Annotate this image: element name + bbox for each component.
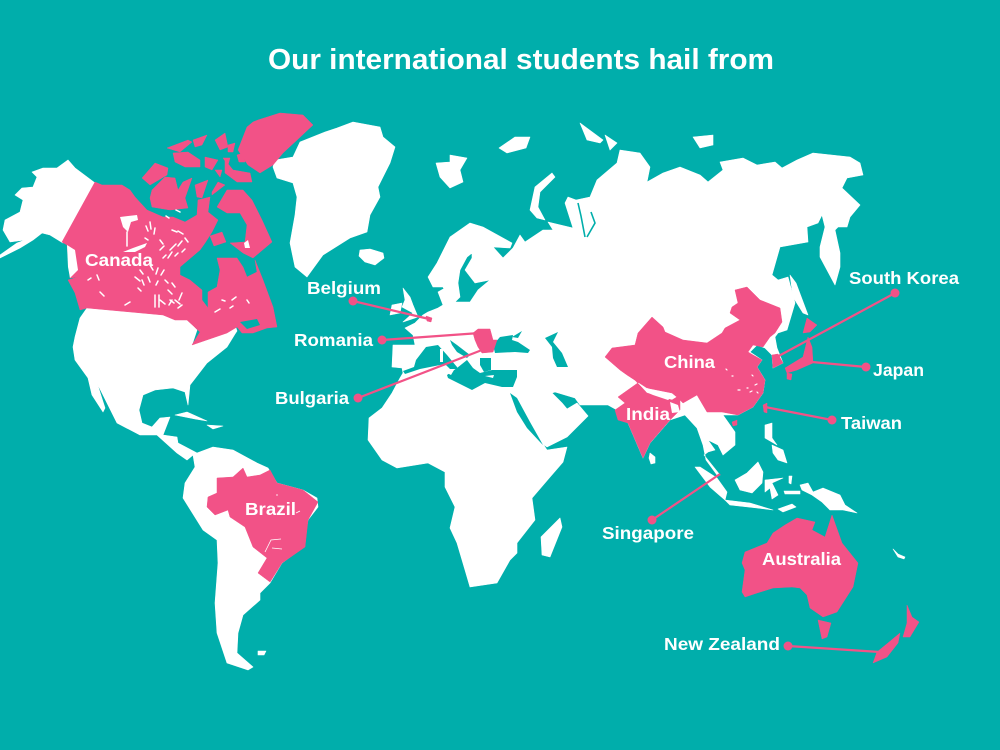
- line: Belgium: [348, 296, 429, 319]
- Quebec lake: [244, 240, 250, 248]
- Philippines Luzon: [765, 423, 777, 445]
- Brazil: [207, 468, 318, 582]
- New Guinea: [800, 483, 857, 513]
- line: Romania: [378, 333, 480, 344]
- Chinese lakes: [726, 369, 758, 393]
- Sea of Azov: [512, 331, 522, 338]
- Philippines Mindanao: [772, 445, 787, 463]
- line: Japan: [812, 362, 870, 372]
- world map: [0, 113, 919, 670]
- line: South Korea: [775, 288, 900, 358]
- Taiwan: [763, 403, 767, 413]
- title: Our international students hail from: [268, 44, 774, 76]
- Afro-Eurasia: [368, 150, 863, 587]
- Hainan: [732, 420, 737, 426]
- Eastern Mediterranean: [447, 360, 517, 390]
- Victoria Island: [150, 177, 192, 210]
- Ireland: [390, 303, 402, 315]
- Western Mediterranean: [403, 345, 458, 374]
- Falklands: [258, 651, 266, 655]
- Honshu: [785, 337, 813, 373]
- Novaya Zemlya: [530, 173, 555, 220]
- labels: [85, 250, 959, 654]
- South Korea: [772, 354, 783, 368]
- Kyushu: [787, 373, 792, 380]
- label: Singapore: Singapore: [602, 523, 694, 543]
- white details on pink countries: [67, 210, 758, 552]
- Adriatic: [450, 340, 470, 358]
- Mediterranean islands: [440, 349, 494, 378]
- Belgium: [426, 316, 432, 322]
- Borneo: [735, 462, 763, 493]
- Ellesmere Island: [238, 113, 313, 173]
- Tasmania: [818, 620, 831, 639]
- Baffin Island: [217, 190, 272, 258]
- label: Taiwan: Taiwan: [841, 413, 902, 433]
- Great Slave Lake: [123, 243, 147, 252]
- Australia: [742, 515, 858, 617]
- Somerset Island: [195, 180, 208, 198]
- New Caledonia and Vanuatu: [893, 549, 905, 559]
- line: Bulgaria: [354, 350, 482, 402]
- Aegean: [480, 358, 491, 372]
- Bangladesh: [670, 402, 680, 413]
- connector lines: [348, 288, 900, 652]
- Greenland: [273, 122, 395, 277]
- Alaska: [0, 160, 95, 258]
- Great Bear Lake: [120, 215, 138, 232]
- New Zealand North Island: [903, 605, 919, 637]
- Madagascar: [541, 518, 562, 557]
- Gulf of St Lawrence: [240, 319, 260, 329]
- label: New Zealand: New Zealand: [664, 634, 780, 654]
- Arctic islands: [212, 182, 225, 195]
- Romania and Bulgaria: [473, 329, 497, 353]
- Cuba: [175, 412, 207, 421]
- Brazilian rivers: [265, 494, 300, 552]
- label: Japan: Japan: [873, 360, 924, 380]
- Sumatra: [695, 467, 727, 500]
- China: [605, 287, 782, 415]
- Hokkaido: [803, 318, 817, 333]
- Nepal: [646, 388, 672, 400]
- label: Canada: Canada: [85, 250, 153, 270]
- Hispaniola: [207, 425, 223, 429]
- Canadian lakes: [88, 210, 249, 312]
- line: New Zealand: [784, 642, 880, 652]
- New Siberian Islands: [693, 135, 713, 148]
- Java and Lesser Sunda: [725, 500, 773, 510]
- Red Sea: [510, 393, 543, 445]
- label: Bulgaria: Bulgaria: [275, 388, 349, 408]
- Canada mainland: [62, 182, 277, 345]
- Devon Island: [225, 160, 252, 182]
- line: Singapore: [648, 474, 720, 524]
- Iceland: [359, 249, 384, 265]
- Alaska-Canada coastal strip: [67, 245, 78, 278]
- seas and lakes cut out of land: [403, 331, 568, 445]
- Ob and Taz gulfs: [578, 203, 595, 237]
- Severnaya Zemlya: [580, 123, 603, 143]
- pink countries: [62, 113, 919, 663]
- label: Brazil: Brazil: [245, 499, 296, 519]
- label: Belgium: Belgium: [307, 278, 381, 298]
- Sulawesi: [765, 478, 783, 499]
- line: Taiwan: [765, 407, 836, 424]
- Sakhalin: [790, 275, 808, 315]
- Americas: [73, 308, 318, 670]
- Banks Island: [142, 163, 168, 185]
- Moluccas: [789, 476, 792, 484]
- India: [615, 378, 680, 458]
- Svalbard: [436, 155, 467, 188]
- New Zealand South Island: [873, 633, 900, 663]
- label: Romania: Romania: [294, 330, 373, 350]
- Black Sea: [493, 335, 530, 353]
- Great Britain: [402, 288, 418, 322]
- white land masses: [0, 122, 905, 670]
- label: Australia: Australia: [762, 549, 841, 569]
- Sri Lanka: [649, 453, 655, 464]
- label: India: India: [626, 404, 670, 424]
- label: China: China: [664, 352, 715, 372]
- Franz Josef Land: [499, 137, 530, 153]
- label: South Korea: South Korea: [849, 268, 959, 288]
- Caspian Sea: [545, 332, 568, 367]
